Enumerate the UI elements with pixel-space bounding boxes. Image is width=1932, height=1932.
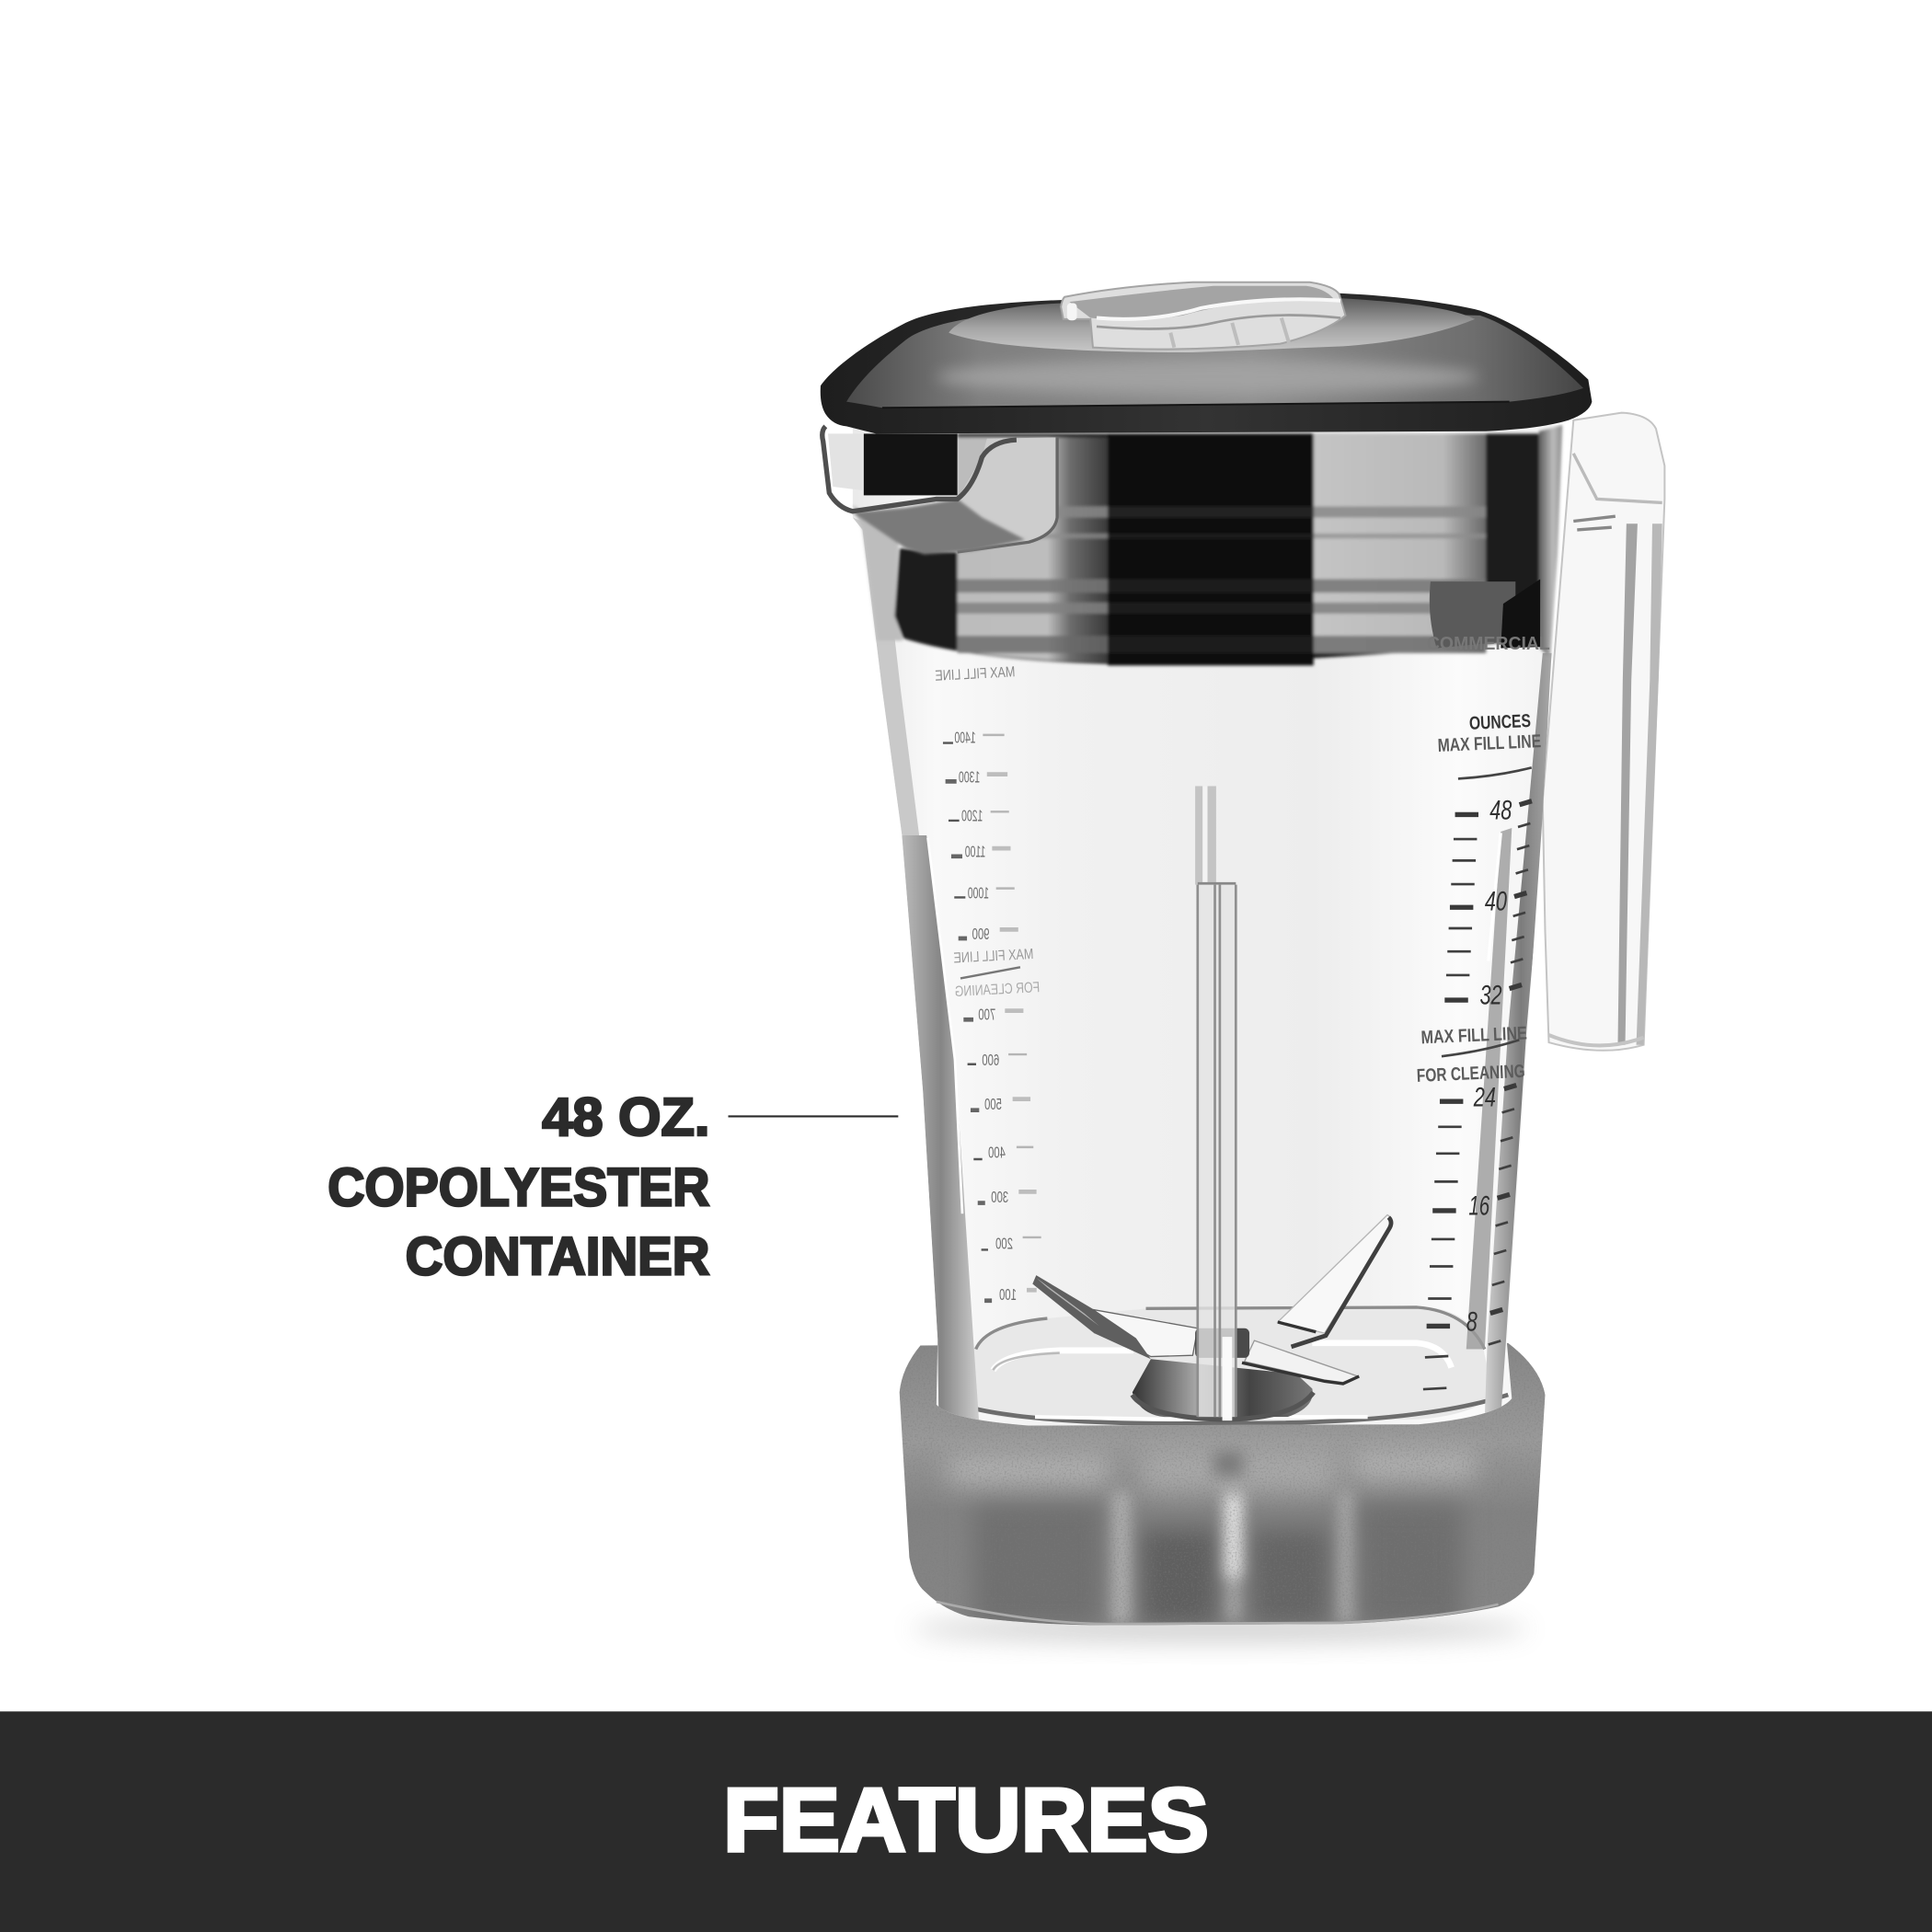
ounce numbers: 32 [1479, 981, 1502, 1011]
millilitre numbers: 1200 [961, 808, 983, 825]
upright right blade [1278, 1215, 1391, 1333]
frosted base [897, 1340, 1550, 1630]
banner: features [0, 1711, 1932, 1932]
ounce scale [1416, 711, 1542, 1389]
ounce numbers: 24 [1473, 1083, 1496, 1113]
millilitre thick ticks [946, 781, 992, 1301]
lid top surface [846, 311, 1583, 408]
dark inner lid sleeve [822, 425, 1562, 665]
left wall [853, 517, 980, 1430]
blade hub [1133, 1359, 1313, 1417]
blade assembly [1032, 1215, 1391, 1420]
horizontal stripes [958, 433, 1486, 665]
clear container body [850, 425, 1565, 1430]
lid opening [949, 298, 1475, 352]
millilitre numbers: 1100 [965, 844, 985, 861]
for cleaning: FOR CLEANING [1416, 1062, 1525, 1087]
millilitre numbers [954, 730, 1017, 1305]
ounces heading: OUNCES [1468, 711, 1531, 734]
left wall upper [853, 505, 903, 640]
central black band [1108, 433, 1314, 665]
right wall upper [1539, 425, 1562, 660]
millilitre numbers: 1300 [959, 769, 980, 787]
callout line one: 48 OZ. [542, 1087, 709, 1147]
millilitre numbers: 200 [995, 1236, 1013, 1253]
millilitre numbers: 600 [982, 1052, 999, 1070]
left light zone [958, 437, 1108, 663]
millilitre far thick ticks [987, 775, 1037, 1290]
callout line three: CONTAINER [406, 1226, 709, 1286]
center shaft [1195, 786, 1236, 1420]
container floor [951, 1306, 1508, 1423]
ounce tick marks [1427, 801, 1532, 1326]
inner wall rib [1466, 828, 1512, 1350]
right light zone [1314, 433, 1486, 653]
callout line two: COPOLYESTER [328, 1157, 709, 1217]
ounce numbers: 8 [1466, 1306, 1478, 1337]
millilitre numbers: 900 [972, 926, 990, 944]
millilitre numbers: 1000 [968, 885, 989, 903]
brand mark: COMMERCIAL [1427, 634, 1550, 654]
mirrored top max fill label: MAX FILL LINE [935, 663, 1016, 684]
ounce numbers: 48 [1489, 796, 1512, 826]
mirrored millilitre scale [935, 663, 1041, 1305]
mirrored for cleaning label: FOR CLEANING [954, 979, 1041, 1000]
banner heading: FEATURES [723, 1770, 1209, 1870]
lid outer rim [821, 293, 1592, 433]
millilitre numbers: 100 [999, 1287, 1017, 1305]
callout leader line [729, 1115, 898, 1117]
millilitre far ticks [983, 735, 1041, 1237]
lower lid shadow line [882, 402, 1510, 408]
ounce numbers: 40 [1485, 887, 1507, 917]
pour loop [828, 433, 863, 490]
lower right blade [1245, 1340, 1358, 1383]
right wall band [1485, 653, 1558, 1417]
spout window [958, 437, 1057, 552]
millilitre numbers: 1400 [954, 730, 976, 747]
left blade [1094, 1310, 1198, 1357]
max fill line: MAX FILL LINE [1437, 731, 1542, 756]
ounce numbers [1466, 796, 1512, 1337]
black pour zone [864, 433, 958, 495]
lid [821, 282, 1592, 433]
cleaning max fill line: MAX FILL LINE [1420, 1023, 1527, 1048]
center collar [1195, 1328, 1249, 1358]
spout shadow [853, 499, 1025, 555]
handle [1543, 413, 1664, 1051]
clear lid plug [1061, 282, 1345, 350]
shadow under base [912, 1616, 1528, 1642]
millilitre numbers: 300 [991, 1190, 1008, 1207]
blender jar illustration [821, 282, 1664, 1642]
ounce minor ticks [1423, 823, 1530, 1389]
ounce numbers: 16 [1468, 1191, 1490, 1222]
millilitre numbers: 700 [978, 1006, 995, 1024]
callout: container material [328, 1087, 709, 1286]
millilitre dark ticks [943, 743, 988, 1249]
brand mark [1427, 579, 1550, 654]
millilitre numbers: 500 [984, 1097, 1002, 1114]
millilitre numbers: 400 [988, 1144, 1006, 1162]
mirrored cleaning max fill label: MAX FILL LINE [953, 946, 1034, 967]
